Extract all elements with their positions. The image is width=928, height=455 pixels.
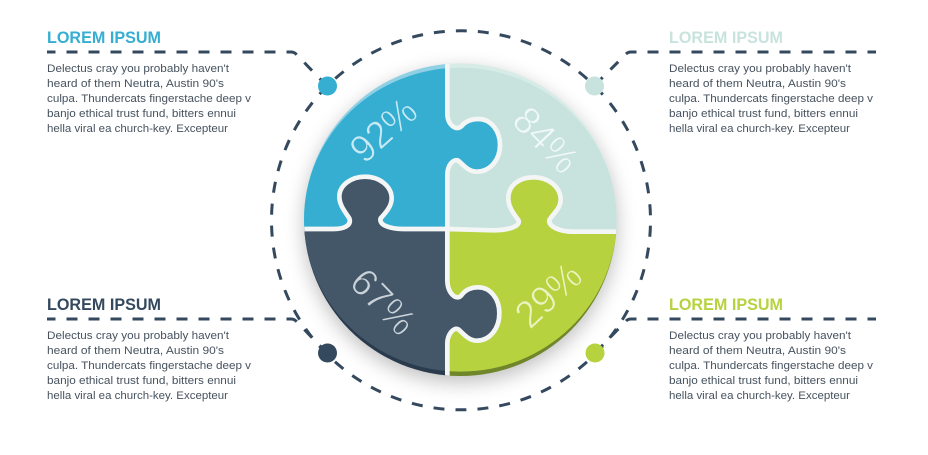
- body: top left: Delectus cray you probably haven't: [47, 63, 229, 75]
- leader line: bottom right: [597, 319, 876, 351]
- puzzle pieces: [304, 68, 616, 372]
- leader line: bottom left: [47, 319, 325, 351]
- value: 67%: 67%: [341, 260, 424, 344]
- heading: top right: LOREM IPSUM: [669, 29, 783, 47]
- body: top left: hella viral ea church-key. Excepteur: [47, 123, 228, 135]
- dot: top left: [318, 76, 337, 96]
- body: bottom left: banjo ethical trust fund, bitters ennui: [47, 375, 236, 387]
- body: top left: [47, 63, 252, 135]
- body: bottom right: culpa. Thundercats fingerstache deep v: [669, 360, 874, 372]
- body: top right: heard of them Neutra, Austin 90's: [669, 78, 847, 90]
- text block: top left: [47, 29, 252, 135]
- text block: bottom right: [669, 296, 874, 402]
- dot: bottom right: [586, 344, 604, 362]
- disc shadow: [304, 70, 616, 382]
- dot: bottom left: [318, 344, 337, 362]
- body: top left: culpa. Thundercats fingerstache deep v: [47, 93, 252, 105]
- body: bottom right: Delectus cray you probably haven't: [669, 330, 851, 342]
- body: top right: [669, 63, 874, 135]
- leader line: top right: [596, 52, 876, 84]
- value: 92%: 92%: [342, 90, 426, 172]
- dashed ring: [272, 31, 650, 410]
- body: bottom right: heard of them Neutra, Austin 90's: [669, 345, 847, 357]
- body: bottom right: hella viral ea church-key. Excepteur: [669, 390, 850, 402]
- white seams: [300, 60, 620, 380]
- body: bottom right: [669, 330, 874, 402]
- body: top right: hella viral ea church-key. Excepteur: [669, 123, 850, 135]
- text block: top right: [669, 29, 874, 135]
- heading: top left: LOREM IPSUM: [47, 29, 161, 47]
- value: 29%: 29%: [507, 254, 591, 337]
- body: bottom left: Delectus cray you probably haven't: [47, 330, 229, 342]
- body: bottom left: heard of them Neutra, Austin 90's: [47, 345, 225, 357]
- body: top left: heard of them Neutra, Austin 90's: [47, 78, 225, 90]
- dot: top right: [585, 76, 604, 96]
- body: top right: Delectus cray you probably haven't: [669, 63, 851, 75]
- puzzle disc: [304, 64, 617, 376]
- heading: bottom left: LOREM IPSUM: [47, 296, 161, 314]
- body: bottom left: [47, 330, 252, 402]
- text block: bottom left: [47, 296, 252, 402]
- body: bottom left: culpa. Thundercats fingerstache deep v: [47, 360, 252, 372]
- body: bottom right: banjo ethical trust fund, bitters ennui: [669, 375, 858, 387]
- body: top right: banjo ethical trust fund, bitters ennui: [669, 108, 858, 120]
- leader line: top left: [47, 52, 325, 84]
- value: 84%: 84%: [504, 99, 587, 182]
- body: bottom left: hella viral ea church-key. Excepteur: [47, 390, 228, 402]
- body: top left: banjo ethical trust fund, bitters ennui: [47, 108, 236, 120]
- body: top right: culpa. Thundercats fingerstache deep v: [669, 93, 874, 105]
- heading: bottom right: LOREM IPSUM: [669, 296, 783, 314]
- disc rim: [304, 64, 616, 376]
